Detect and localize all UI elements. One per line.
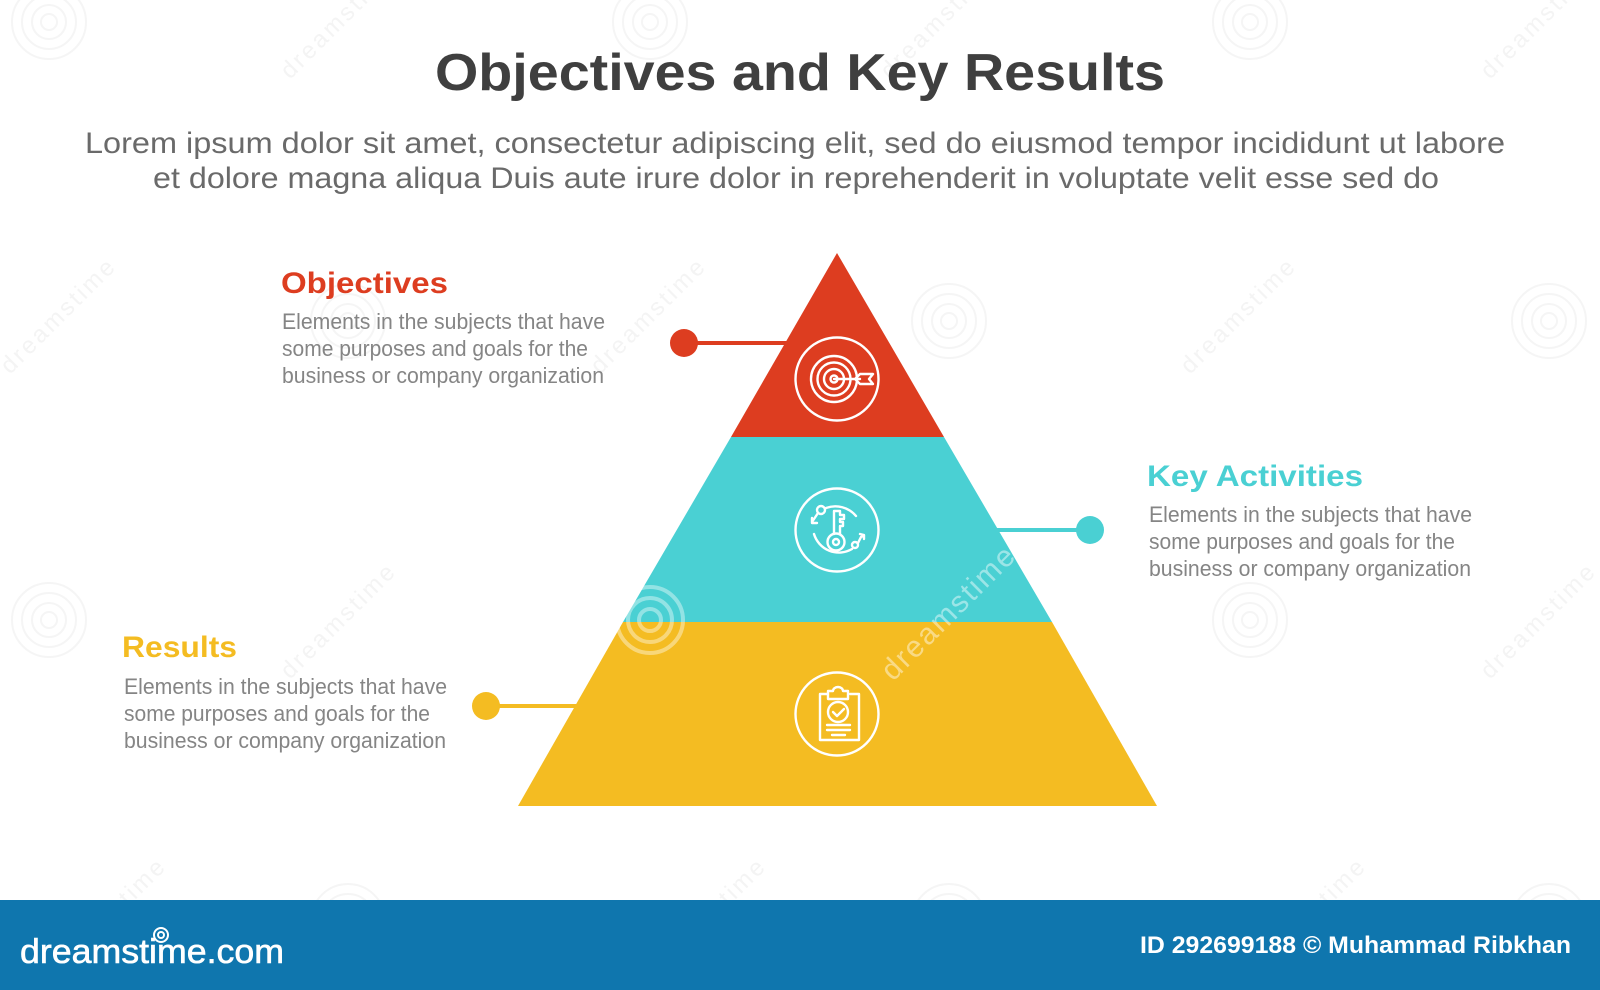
connector: results: [472, 692, 585, 720]
icon: target with arrow: [796, 338, 878, 420]
text: dreamstime: [1475, 559, 1600, 684]
footer logo text: dreamstime.com: [20, 933, 284, 971]
icon: clipboard with check: [796, 672, 878, 756]
footer logo spiral icon: [154, 928, 168, 942]
description: objectives: business or company organization: [282, 363, 604, 388]
connector: objectives: [670, 329, 790, 357]
description: results: [124, 674, 447, 753]
pyramid chart: [472, 253, 1157, 806]
footer band: [0, 900, 1600, 990]
text: dreamstime: [275, 559, 400, 684]
results label: [122, 631, 447, 753]
objectives label: [281, 267, 605, 388]
icon: key with cycle arrows: [796, 488, 878, 572]
description: key activities: Elements in the subjects that have: [1149, 502, 1472, 527]
description: objectives: some purposes and goals for the: [282, 336, 588, 361]
description: objectives: [282, 309, 605, 388]
watermark on pyramid: dreamstime: [875, 540, 1022, 687]
heading: key activities: Key Activities: [1147, 460, 1363, 493]
subtitle text block: Lorem ipsum dolor sit amet, consectetur adipiscing elit, sed do eiusmod tempor incididunt ut labore: [85, 127, 1505, 160]
subtitle text block: [85, 127, 1505, 195]
description: results: business or company organization: [124, 728, 446, 753]
description: key activities: some purposes and goals for the: [1149, 529, 1455, 554]
description: results: Elements in the subjects that have: [124, 674, 447, 699]
heading: results: Results: [122, 631, 237, 664]
text: dreamstime: [1245, 854, 1370, 979]
connector: key activities: [990, 516, 1104, 544]
watermark on pyramid: [617, 540, 1022, 687]
text: dreamstime: [585, 254, 710, 379]
subtitle text block: et dolore magna aliqua Duis aute irure dolor in reprehenderit in voluptate velit esse sed do: [153, 162, 1439, 195]
footer credit: ID 292699188 © Muhammad Ribkhan: [1140, 932, 1571, 959]
pyramid tier: key activities: [623, 437, 1052, 622]
description: results: some purposes and goals for the: [124, 701, 430, 726]
text: dreamstime: [645, 854, 770, 979]
description: key activities: business or company organization: [1149, 556, 1471, 581]
text: dreamstime: [1175, 254, 1300, 379]
description: objectives: Elements in the subjects that have: [282, 309, 605, 334]
text: dreamstime: [45, 854, 170, 979]
key activities label: [1147, 460, 1472, 581]
heading: objectives: Objectives: [281, 267, 448, 300]
title: Objectives and Key Results: [435, 44, 1165, 102]
description: key activities: [1149, 502, 1472, 581]
pyramid tier: results: [518, 622, 1157, 806]
pyramid tier: objectives: [731, 253, 944, 437]
